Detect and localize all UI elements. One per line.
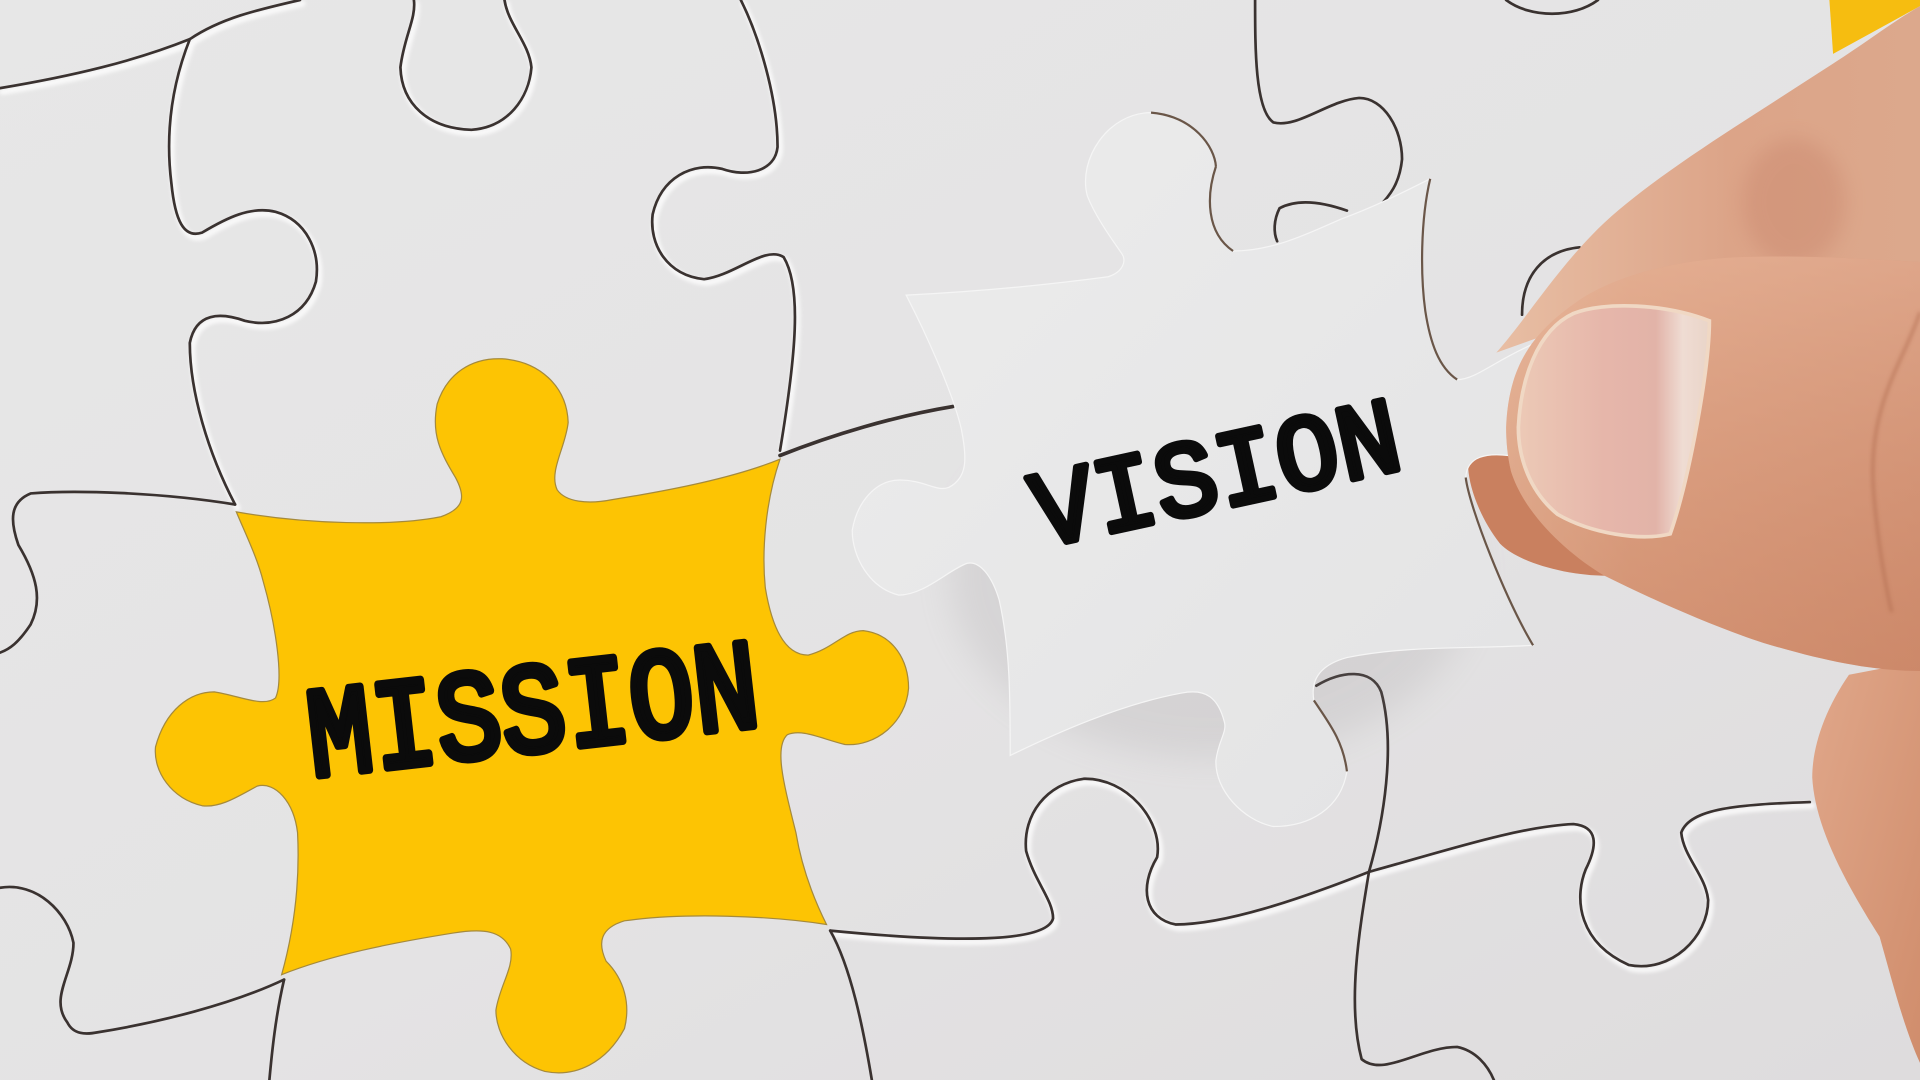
index finger (1496, 6, 1920, 353)
empty slot with MISSION label (155, 359, 909, 1073)
piece cut edges (1151, 113, 1533, 771)
yellow slot (155, 359, 909, 1073)
thumb crease (1873, 312, 1920, 612)
index finger knuckle shading (1742, 138, 1845, 266)
MISSION text: MISSION (300, 621, 767, 815)
hand holding the piece (1496, 6, 1920, 1063)
thumb (1506, 256, 1920, 671)
lower finger behind the piece (1468, 453, 1616, 576)
lower finger (1812, 661, 1920, 1063)
piece shape (852, 113, 1533, 827)
yellow corner at top right (1829, 0, 1920, 54)
puzzle piece with VISION label (852, 113, 1533, 827)
thumbnail (1518, 306, 1709, 537)
moved puzzle piece shadow (949, 392, 1476, 759)
VISION text: VISION (1022, 381, 1413, 580)
